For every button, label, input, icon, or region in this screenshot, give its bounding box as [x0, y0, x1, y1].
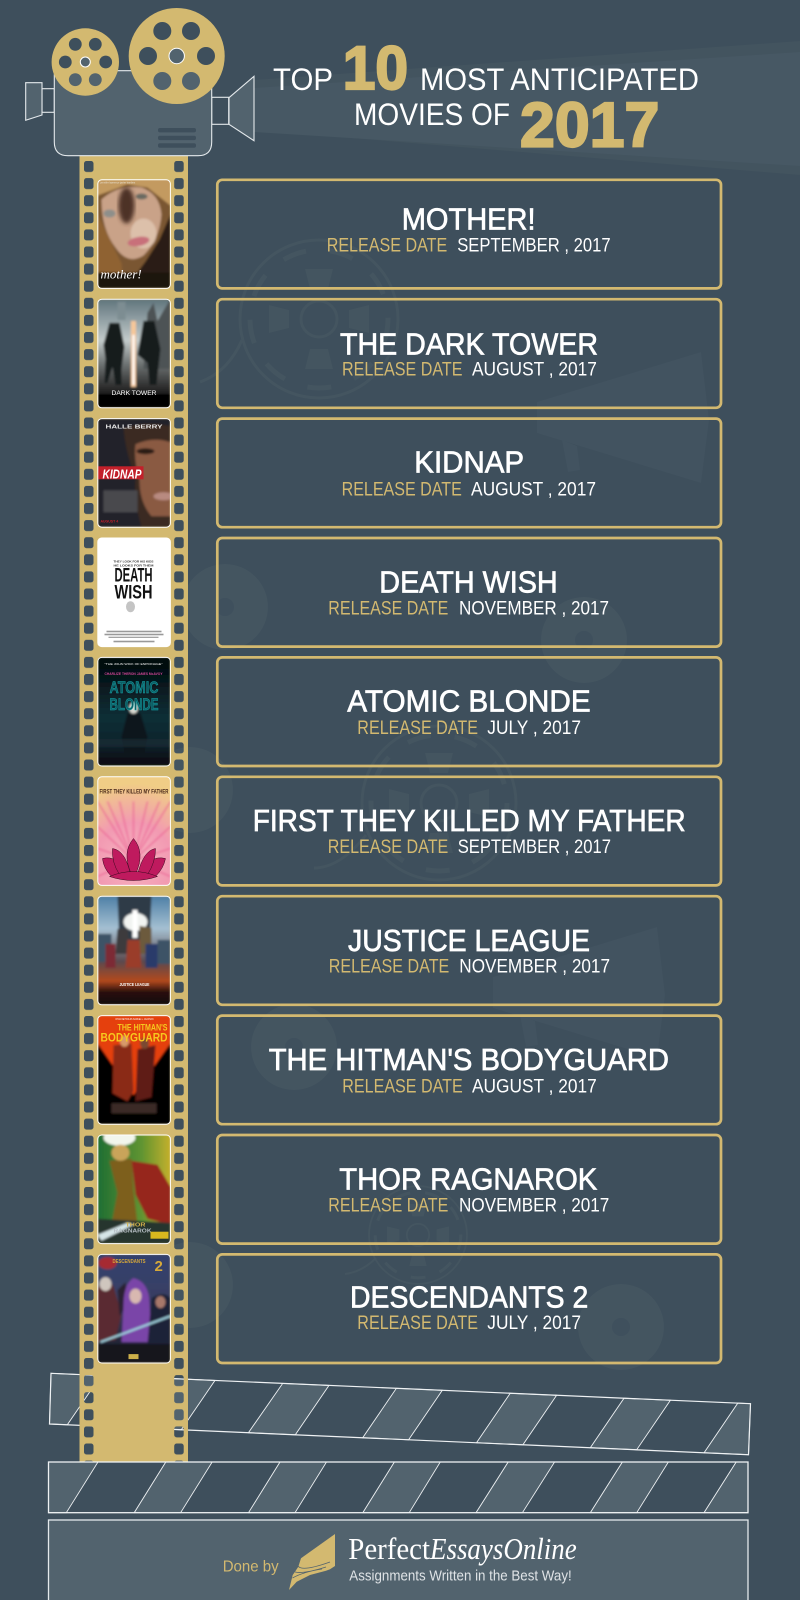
poster: Death Wish: HE LOOKS FOR THEM — [114, 564, 154, 568]
poster: Mother!: mother! — [100, 266, 142, 282]
panel: Thor Ragnarok — [217, 1135, 721, 1244]
release date value: NOVEMBER , 2017 — [459, 955, 610, 977]
poster: The Hitman's Bodyguard: THE HITMAN'S — [118, 1022, 168, 1033]
panel: footer credit — [48, 1520, 748, 1600]
release date value: JULY , 2017 — [487, 717, 581, 739]
release date value: JULY , 2017 — [487, 1312, 581, 1334]
release date label: RELEASE DATE — [328, 1194, 448, 1216]
poster: Kidnap — [98, 418, 174, 527]
poster: Death Wish: WISH — [114, 583, 152, 604]
done by label: Done by — [223, 1559, 279, 1576]
panel: The Dark Tower — [217, 299, 721, 408]
projector body — [54, 71, 212, 156]
release date value: NOVEMBER , 2017 — [459, 597, 609, 619]
poster: Death Wish — [98, 538, 170, 647]
clapperboard top arm — [50, 1373, 750, 1455]
tagline: Assignments Written in the Best Way! — [349, 1569, 572, 1585]
poster: Kidnap: AUGUST 4 — [100, 519, 118, 523]
release date label: RELEASE DATE — [357, 1312, 478, 1334]
poster: Atomic Blonde: BLONDE — [110, 695, 158, 714]
brand name: Perfect — [348, 1531, 430, 1566]
release date value: NOVEMBER , 2017 — [459, 1194, 609, 1216]
film strip — [80, 150, 188, 1462]
poster: The Hitman's Bodyguard: BODYGUARD — [100, 1032, 168, 1044]
panel: Kidnap — [217, 419, 721, 527]
panel: Death Wish — [217, 538, 721, 647]
large film reel — [129, 8, 225, 104]
poster: Descendants 2 — [98, 1254, 170, 1363]
background watermark: film reels and lenses — [147, 240, 709, 1370]
poster: Atomic Blonde: ATOMIC — [110, 678, 158, 697]
poster: Thor Ragnarok: THOR — [126, 1223, 146, 1229]
release date value: AUGUST , 2017 — [471, 478, 596, 500]
poster: Justice League: JUSTICE LEAGUE — [120, 982, 150, 987]
movie title: KIDNAP — [414, 445, 524, 480]
movie title: THE DARK TOWER — [340, 326, 598, 361]
heading: 10 — [343, 34, 408, 102]
poster: Justice League — [98, 896, 170, 1005]
clapperboard base — [48, 1462, 748, 1513]
movie title: ATOMIC BLONDE — [347, 684, 591, 719]
projector vents — [158, 128, 196, 148]
poster: Atomic Blonde — [98, 657, 170, 766]
heading — [273, 34, 699, 161]
projector rear connector — [42, 89, 54, 112]
release date label: RELEASE DATE — [328, 597, 448, 619]
poster: First They Killed My Father: FIRST THEY KILLED MY FATHER — [100, 790, 169, 796]
heading: MOVIES OF — [354, 96, 510, 132]
heading: TOP — [273, 61, 333, 97]
poster: Mother!: jennifer lawrence javier bardem — [100, 182, 135, 184]
poster: Atomic Blonde: CHARLIZE THERON JAMES McAVOY — [104, 672, 163, 676]
small film reel — [52, 28, 119, 96]
movie title: FIRST THEY KILLED MY FATHER — [253, 803, 686, 838]
panel: The Hitman's Bodyguard — [217, 1016, 721, 1124]
poster: Kidnap: KIDNAP — [102, 466, 142, 481]
release date value: SEPTEMBER , 2017 — [458, 836, 611, 858]
movie title: DESCENDANTS 2 — [350, 1280, 588, 1315]
panel: Justice League — [217, 896, 721, 1005]
release date value: AUGUST , 2017 — [472, 359, 597, 381]
icon: book logo — [289, 1534, 335, 1590]
projector front lens — [229, 76, 254, 141]
poster: First They Killed My Father — [98, 776, 170, 886]
panel: Mother! — [217, 180, 721, 288]
projector front connector — [212, 97, 229, 124]
poster: Mother! — [98, 180, 170, 288]
brand name italic: EssaysOnline — [429, 1531, 577, 1566]
panel: Atomic Blonde — [217, 657, 721, 766]
projector light beam — [254, 41, 800, 175]
icon: film projector — [26, 8, 254, 156]
projector rear lens — [26, 83, 42, 120]
release date label: RELEASE DATE — [329, 955, 449, 977]
poster: The Dark Tower: DARK TOWER — [112, 390, 157, 397]
poster: Kidnap: HALLE BERRY — [106, 424, 164, 430]
poster: The Hitman's Bodyguard: RYAN REYNOLDS SAMUEL L. JACKSON — [116, 1017, 154, 1021]
poster: The Hitman's Bodyguard — [98, 1015, 170, 1124]
movie title: THOR RAGNAROK — [339, 1161, 598, 1196]
panel: First They Killed My Father — [217, 777, 721, 885]
release date value: AUGUST , 2017 — [472, 1075, 597, 1097]
poster: Death Wish: DEATH — [114, 566, 152, 587]
poster: Thor Ragnarok: RAGNAROK — [114, 1229, 152, 1235]
movie title: THE HITMAN'S BODYGUARD — [269, 1042, 669, 1077]
poster: Descendants 2: DESCENDANTS — [112, 1259, 146, 1265]
movie title: MOTHER! — [402, 201, 536, 236]
movie title: JUSTICE LEAGUE — [348, 923, 590, 958]
poster: The Dark Tower — [98, 299, 170, 408]
release date value: SEPTEMBER , 2017 — [457, 235, 611, 257]
poster: Descendants 2: 2 — [154, 1258, 163, 1275]
poster: Atomic Blonde: "THE JOHN WICK OF ESPIONAGE" — [104, 662, 162, 666]
movie title: DEATH WISH — [379, 565, 558, 600]
poster: Death Wish: THEY LOOK FOR HIS KIDS — [114, 560, 154, 564]
panel: Descendants 2 — [217, 1254, 721, 1363]
release date label: RELEASE DATE — [357, 717, 478, 739]
release date label: RELEASE DATE — [327, 235, 447, 257]
release date label: RELEASE DATE — [328, 836, 448, 858]
release date label: RELEASE DATE — [342, 478, 462, 500]
poster: Thor Ragnarok — [98, 1130, 170, 1244]
release date label: RELEASE DATE — [342, 1075, 463, 1097]
heading: 2017 — [520, 91, 659, 161]
release date label: RELEASE DATE — [342, 359, 462, 381]
heading: MOST ANTICIPATED — [420, 61, 699, 97]
